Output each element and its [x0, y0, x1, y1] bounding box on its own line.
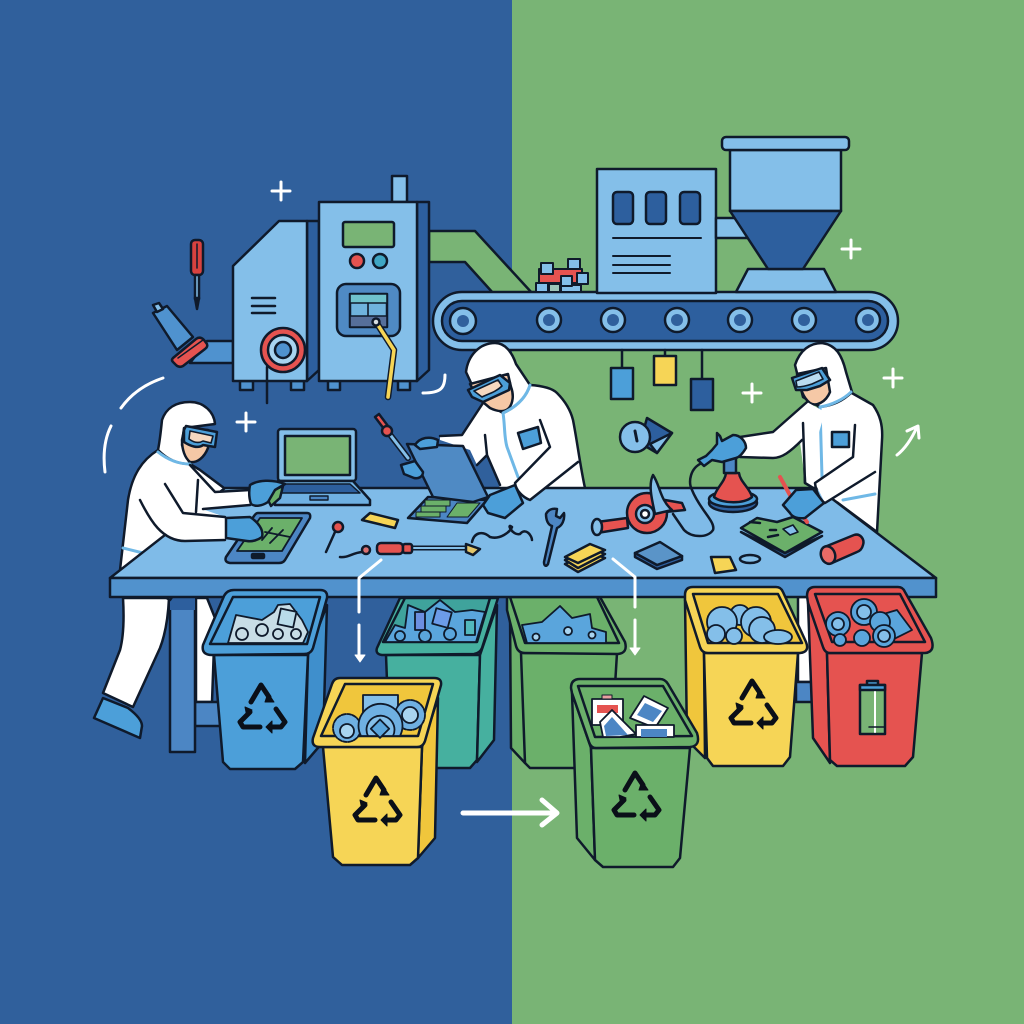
table leg	[170, 598, 195, 752]
yellow front bin	[313, 678, 441, 865]
red cylinder	[818, 535, 863, 566]
worker 1 legs	[94, 598, 225, 738]
worker 1 arms	[140, 465, 285, 541]
icon: recycle, yellow front bin	[355, 778, 400, 826]
yellow stack	[565, 544, 605, 572]
green front bin	[571, 679, 698, 867]
teal bin	[377, 598, 498, 768]
cable	[673, 463, 713, 536]
tablet	[226, 513, 310, 563]
wrench	[544, 509, 564, 566]
conveyor belt	[433, 292, 898, 350]
batteries in green bin	[592, 695, 674, 737]
screwdriver on table	[377, 543, 480, 555]
worker 1 torso and hood	[120, 402, 240, 600]
machine left: control cabinet	[319, 176, 429, 397]
arrow head right	[630, 648, 640, 655]
circuit board	[741, 517, 822, 557]
scrap gears in teal bin	[385, 600, 485, 642]
illustration	[94, 137, 936, 867]
scrap bricks on conveyor	[536, 259, 588, 292]
machine left: shredder section	[233, 221, 319, 403]
red wheel tool	[592, 475, 685, 535]
plunger tool	[709, 450, 757, 512]
green back bin	[507, 597, 626, 768]
small table tools	[326, 513, 398, 557]
arrow head left	[355, 655, 365, 662]
yellow back bin	[685, 587, 807, 766]
icon: screwdriver	[191, 240, 203, 309]
down arrow right	[613, 559, 635, 648]
worker 3 torso and hood	[792, 343, 882, 532]
table front edge	[110, 578, 936, 597]
scrap in green bin	[522, 606, 606, 643]
background: green right half	[512, 0, 1024, 1024]
gears in yellow bin	[333, 695, 425, 742]
worker 2 torso and hood	[440, 343, 585, 488]
blue spheres in yellow bin	[707, 605, 792, 644]
hanging tags	[611, 350, 713, 410]
small yellow part and ring	[711, 555, 760, 573]
background: blue left half	[0, 0, 512, 1024]
dark slab	[635, 542, 682, 569]
blue discs in red bin	[826, 599, 912, 647]
red pen and glove	[783, 489, 824, 522]
table top	[110, 488, 936, 578]
hopper	[716, 137, 849, 292]
green pipe	[429, 231, 532, 293]
white accents	[104, 182, 919, 825]
back laptop	[275, 429, 370, 505]
scrap in blue bin	[228, 604, 308, 643]
worker 3 leg	[796, 597, 812, 702]
up arrow	[897, 426, 919, 455]
red bin	[807, 587, 933, 766]
motion arcs	[104, 375, 445, 472]
nozzle tool	[153, 303, 233, 367]
wire	[472, 526, 532, 542]
icon: battery	[860, 681, 885, 734]
worker 2 right arm and gloves	[401, 410, 578, 518]
soldering tool, worker 2	[375, 414, 408, 458]
front laptop	[407, 444, 488, 523]
worker 3 arms and gloves	[698, 402, 880, 503]
horizontal arrow	[463, 800, 557, 825]
machine right: processing unit	[597, 169, 716, 293]
icon: recycle, blue bin	[240, 685, 285, 733]
icon: recycle, yellow back bin	[731, 681, 776, 729]
floating gauge and chip	[620, 418, 672, 453]
icon: recycle, green front bin	[614, 773, 659, 821]
plus marks	[237, 182, 902, 431]
down arrow left	[359, 560, 381, 655]
blue bin	[203, 590, 327, 769]
